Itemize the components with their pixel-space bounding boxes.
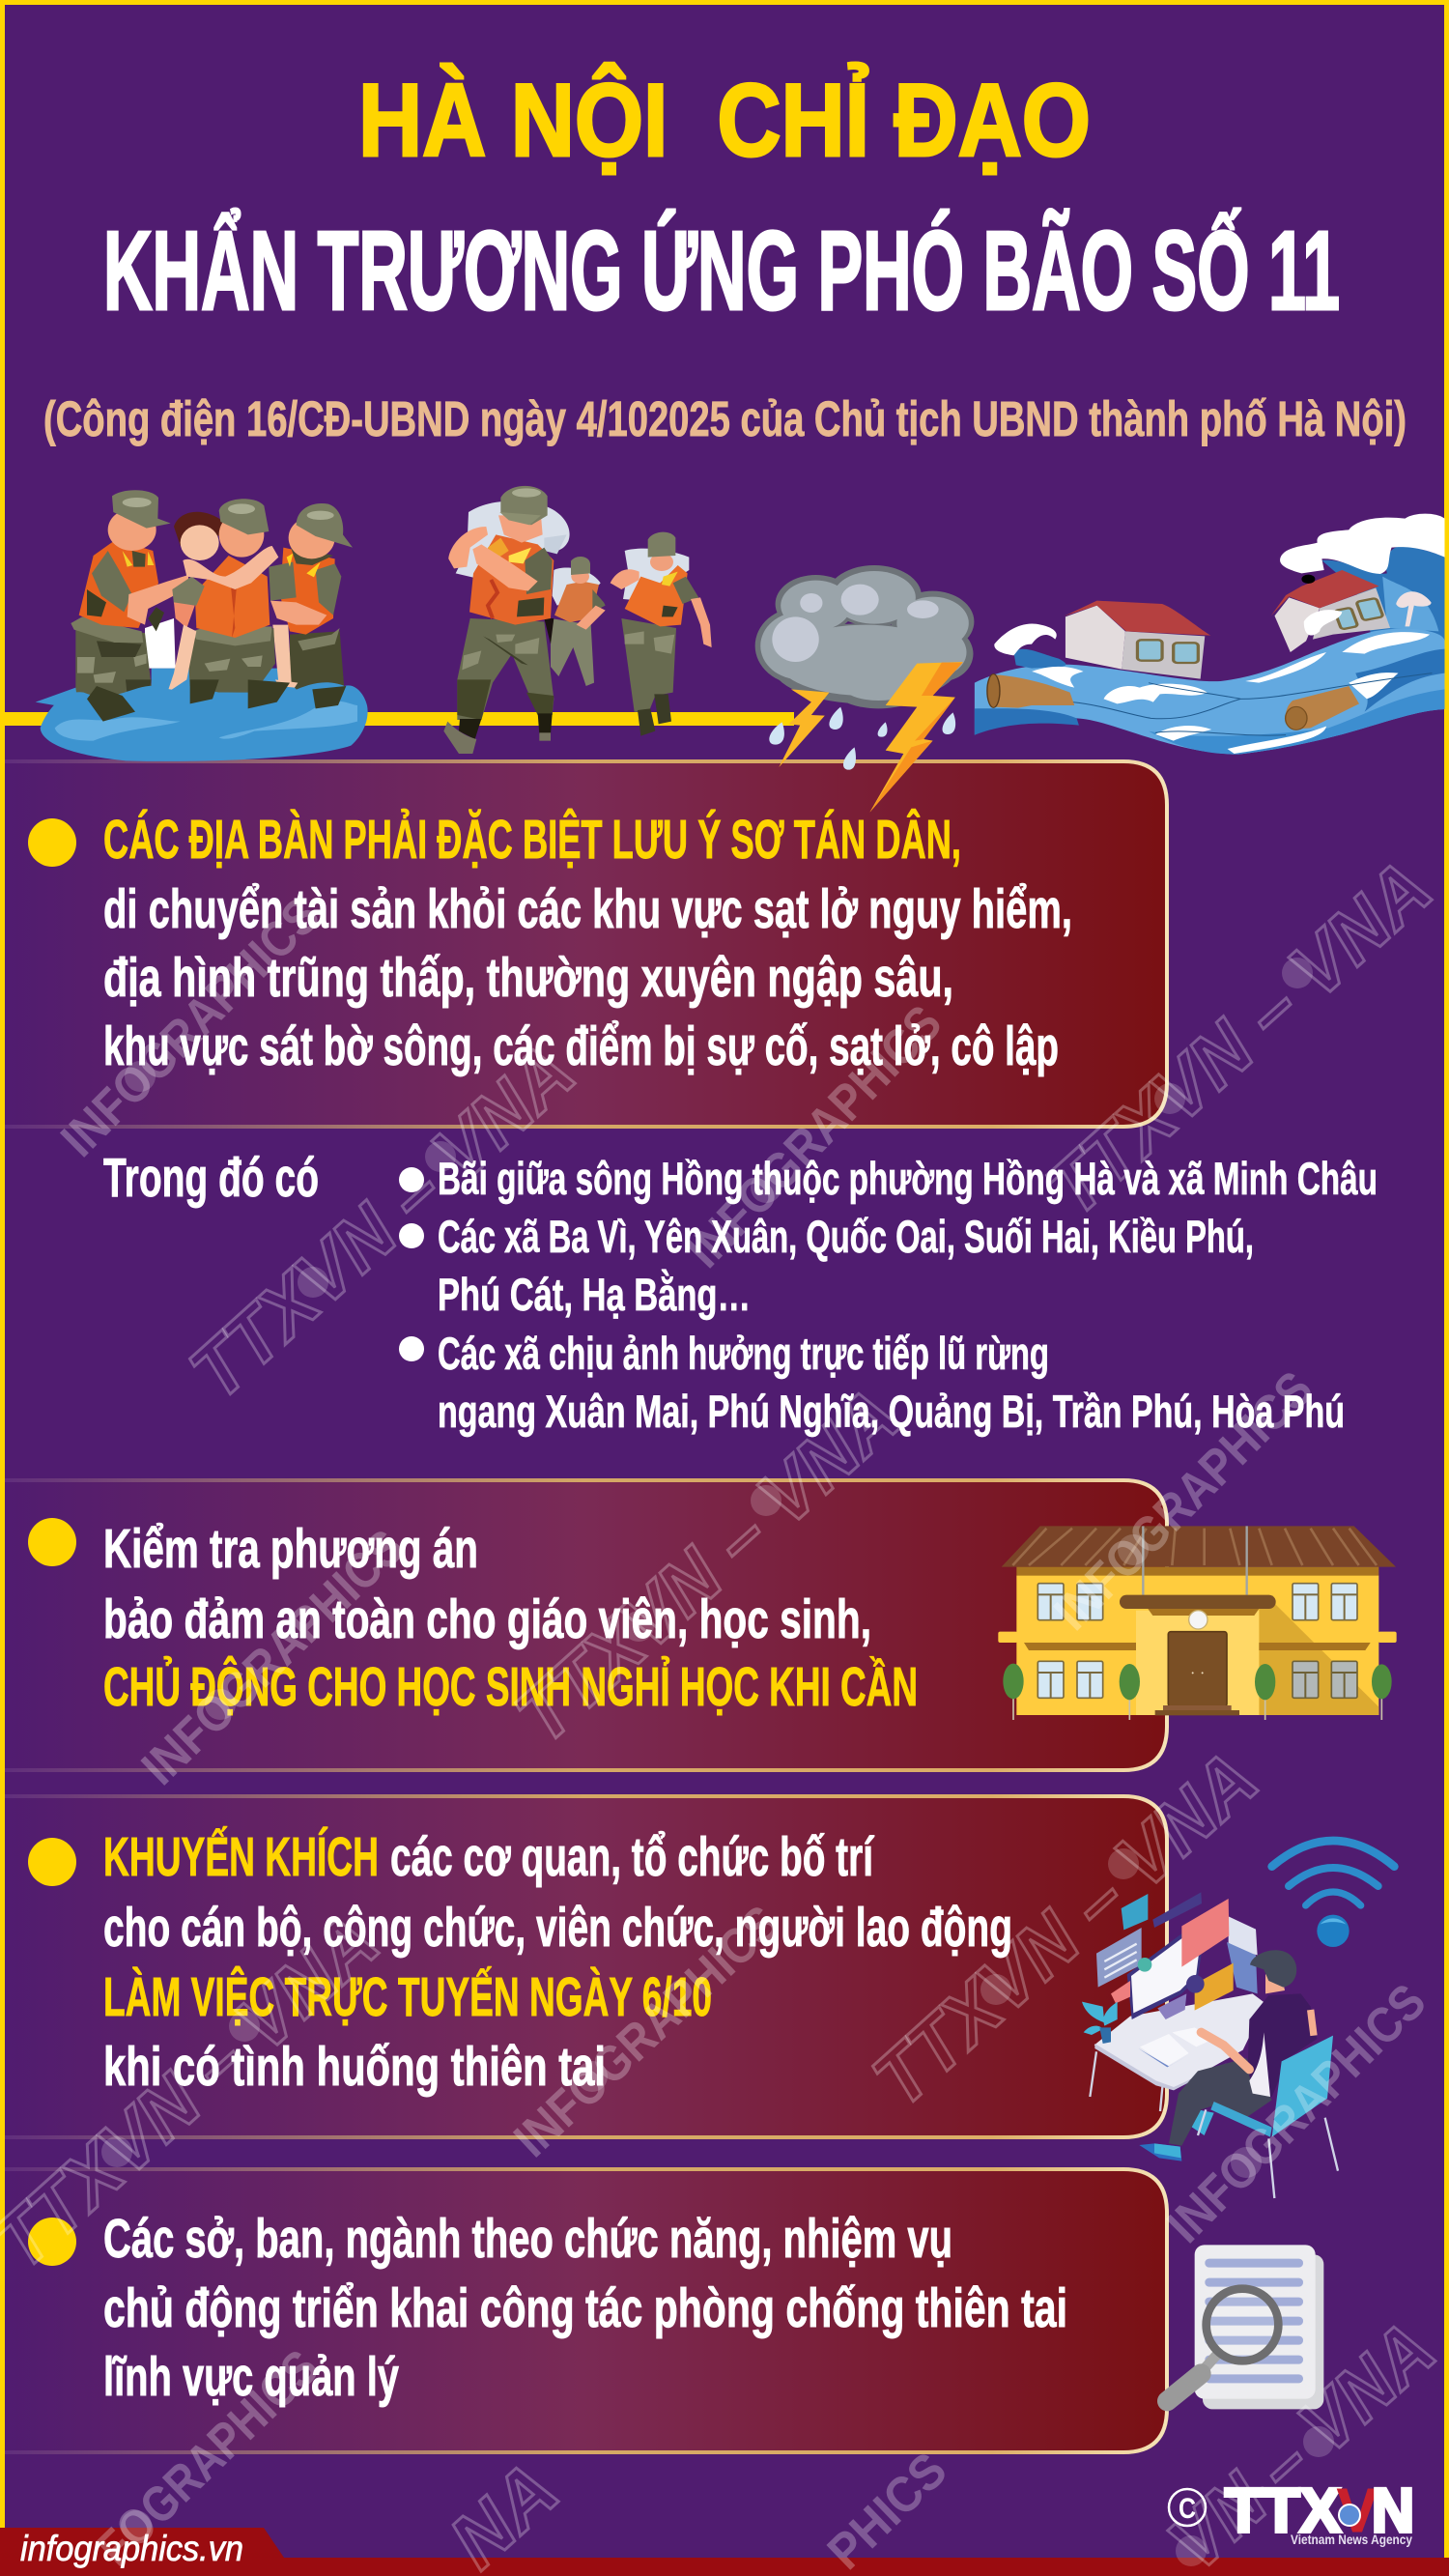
magnifier [1167,2289,1278,2401]
panel 3: remote work [5,1796,1167,2137]
bullet 3 [28,1838,76,1886]
list: affected areas [103,1147,1378,1437]
foam highlights [994,623,1430,754]
rain drops [769,707,955,770]
desk [1090,2051,1162,2111]
panel 3 text: cho cán bộ, công chức, viên chức, người lao động [103,1897,1012,1959]
illustration: storm cloud with lightning [755,565,974,813]
screens and cards [1229,1916,1258,1955]
roof [1002,1526,1396,1567]
list items: Phú Cát, Hạ Bằng… [438,1269,751,1320]
big back wave [1321,546,1444,641]
watermarks: TTXVN – VNA [857,1735,1273,2123]
panel 1 text: địa hình trũng thấp, thường xuyên ngập sâu, [103,947,953,1009]
bullet 2 [28,1518,76,1566]
panel 3 text: KHUYẾN KHÍCH [103,1825,379,1888]
logo: TTXVN: V [1337,2476,1378,2545]
list items [438,1153,1378,1437]
watermarks: FOGRAPHICS [87,2339,329,2576]
copyright mark [1169,2489,1206,2526]
watermarks: INFOGRAPHICS [50,888,330,1167]
yellow divider line [5,712,794,726]
main water body [975,629,1444,755]
watermarks [0,844,1449,2576]
panel 3 text: các cơ quan, tổ chức bố trí [390,1826,874,1888]
illustration: school building [998,1526,1397,1720]
watermarks: INFOGRAPHICS [504,1895,791,2168]
panel 4: departments [5,2169,1167,2452]
watermarks: TTXVN – VNA [1031,844,1447,1232]
panel 1 text [103,808,1072,1077]
windows [1037,1584,1064,1620]
watermarks: TTXVN – VNA [174,1028,590,1416]
illustration: soldiers carrying sandbags [443,486,712,754]
list items: Các xã chịu ảnh hưởng trực tiếp lũ rừng [438,1328,1049,1379]
panel 2 text: bảo đảm an toàn cho giáo viên, học sinh, [103,1589,871,1650]
panel 1 text: di chuyển tài sản khỏi các khu vực sạt lở nguy hiểm, [103,878,1072,940]
trees [1013,1698,1381,1720]
illustration: document and magnifying glass [1167,2245,1323,2409]
panel 4 text: chủ động triển khai công tác phòng chống thiên tai [103,2277,1067,2339]
storm cloud [755,565,974,708]
bullet 4 [28,2218,76,2266]
house 2 [1271,570,1432,652]
agency letters: TTX [1225,2476,1341,2545]
panel 4 text: Các sở, ban, ngành theo chức năng, nhiệm vụ [103,2208,952,2270]
illustration: soldiers rescuing in water [36,490,368,761]
watermarks: INFOGRAPHICS [1043,1361,1323,1641]
watermarks: INFOGRAPHICS [676,995,952,1278]
current lines [1072,673,1432,735]
panel 3 text: khi có tình huống thiên tai [103,2036,606,2098]
white foam [1280,514,1444,574]
logo: TTXVN [1169,2476,1414,2547]
watermark globes [101,958,1334,2566]
panel 2: schools [5,1480,1167,1770]
watermarks: INFOGRAPHICS [131,1519,415,1796]
house 1 [1065,601,1210,679]
entrance [1136,1611,1259,1715]
panel 4 text: lĩnh vực quản lý [103,2346,399,2408]
panel 2 text: Kiểm tra phương án [103,1518,478,1580]
logo: TTXVN: C [1179,2493,1196,2525]
person [1139,1950,1317,2161]
plant [1082,2002,1118,2035]
panel 4 text [103,2208,1067,2408]
walls [1016,1567,1378,1576]
footer: red band [0,2528,1449,2576]
list label: Trong đó có [103,1147,319,1209]
panel 3 text [103,1825,1012,2098]
logo: TTXVN: N [1372,2476,1414,2545]
lightning bolts [779,689,829,767]
agency tagline: Vietnam News Agency [1291,2532,1412,2547]
panel 1 text: CÁC ĐỊA BÀN PHẢI ĐẶC BIỆT LƯU Ý SƠ TÁN DÂN, [103,808,961,871]
panel 3 text: LÀM VIỆC TRỰC TUYẾN NGÀY 6/10 [103,1965,712,2028]
panel 2 text: CHỦ ĐỘNG CHO HỌC SINH NGHỈ HỌC KHI CẦN [103,1655,918,1718]
illustration: flood waves with houses [975,514,1444,755]
footer: site name: infographics.vn [20,2529,243,2568]
illustration: wifi and remote worker [1082,1841,1394,2198]
logs [988,674,1074,708]
panel 2 text [103,1518,918,1718]
laptop and book [1140,2034,1189,2066]
list bullets [399,1167,424,1361]
bullet 1 [28,818,76,867]
wifi icon [1272,1841,1394,1905]
heading: Ha Noi chi dao: HÀ NỘI CHỈ ĐẠO [358,62,1091,178]
chair [1198,2109,1338,2198]
panel 1: evacuation [5,761,1167,1127]
globe [1339,2504,1360,2526]
watermarks: TTXVN – VNA [499,1372,916,1760]
